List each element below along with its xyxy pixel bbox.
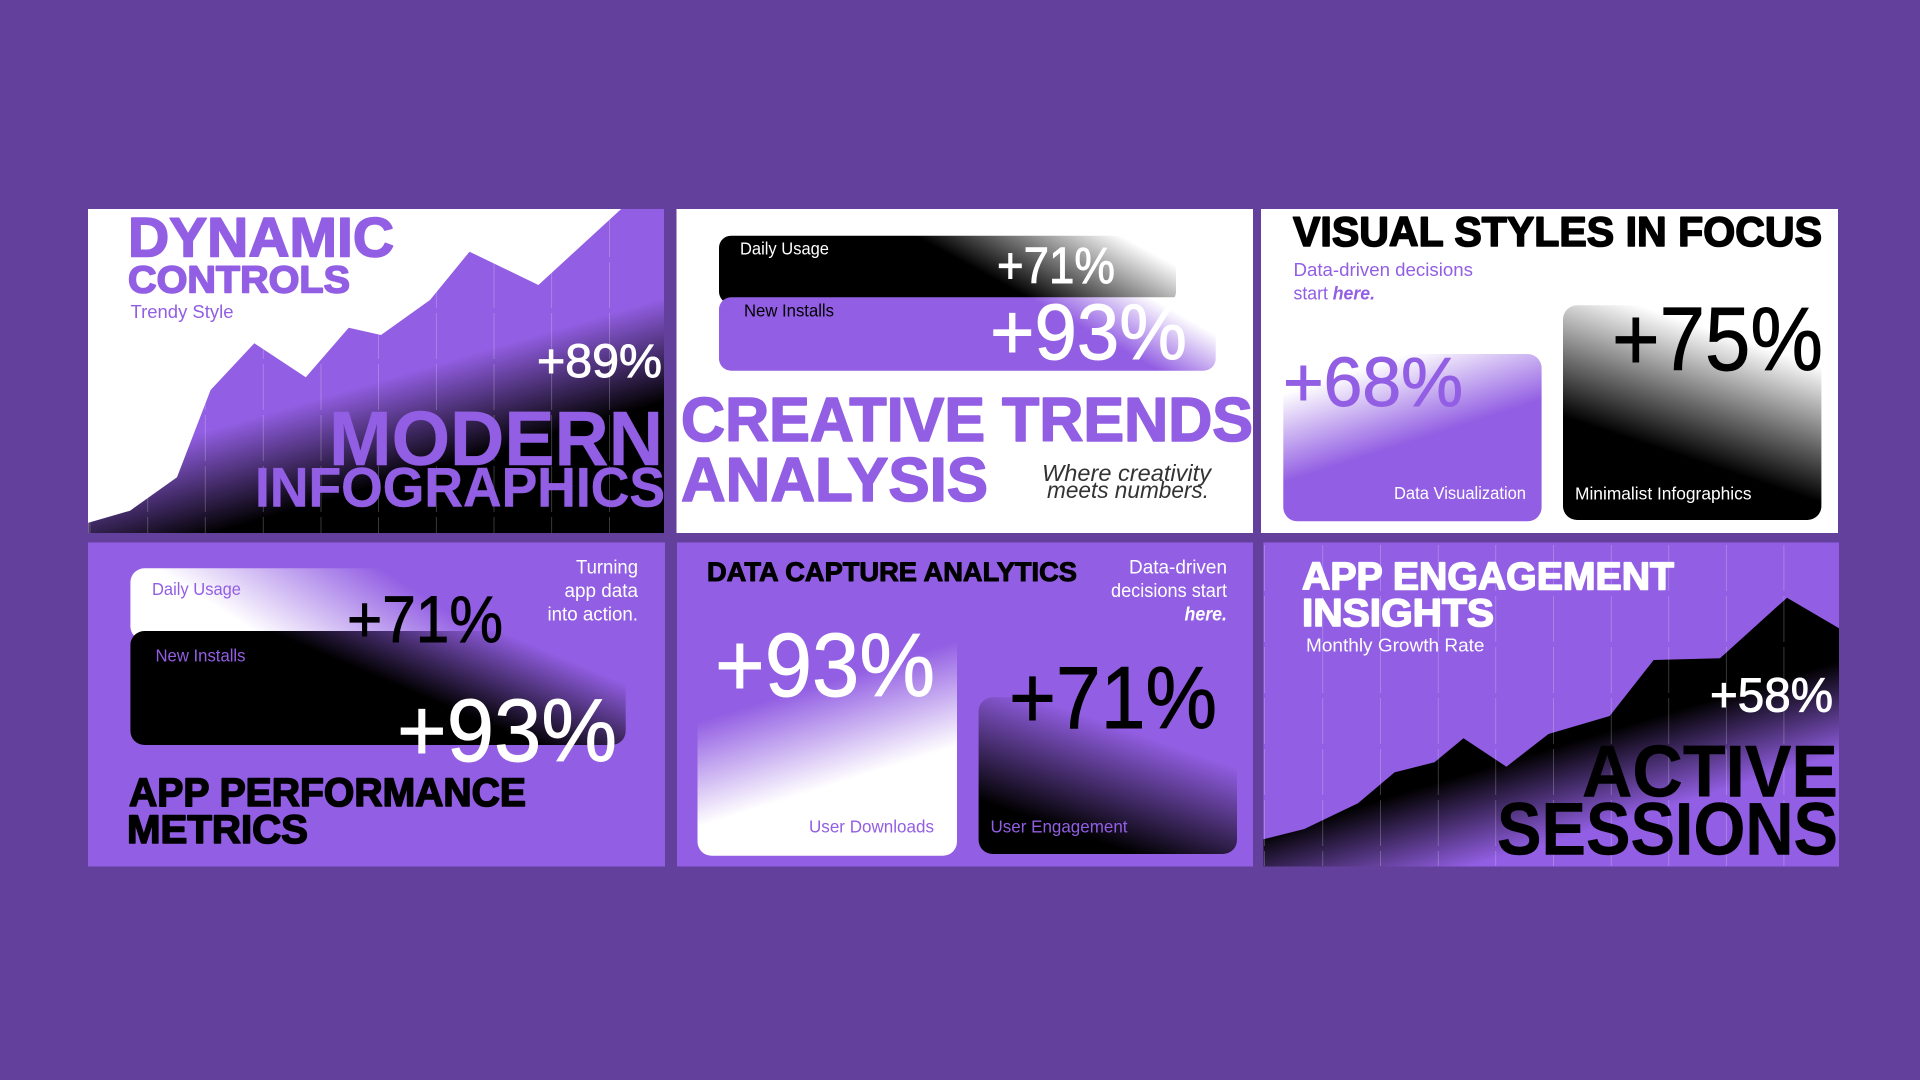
bar: new installs [130, 631, 626, 745]
stat: +93%: +93% [715, 616, 935, 716]
note: data-driven decisions start here: here. [1184, 604, 1227, 626]
subtitle: trendy style: Trendy Style [130, 302, 234, 322]
panel: visual styles in focus [1261, 208, 1838, 533]
stat: +93%: +93% [990, 287, 1187, 376]
heading: active: ACTIVE [1582, 732, 1838, 813]
tagline: where creativity meets numbers: Where creativity [1042, 460, 1212, 486]
heading: modern: MODERN [329, 396, 663, 482]
subtitle: data-driven decisions: start here. [1294, 282, 1375, 304]
bar: daily usage [130, 568, 505, 640]
card: data visualization [1283, 343, 1542, 521]
card: minimalist infographics [1563, 290, 1823, 520]
tagline: where creativity meets numbers [1042, 460, 1212, 503]
panel: creative trends analysis [676, 209, 1253, 533]
area chart: black gradient [1263, 598, 1839, 866]
area chart: rising gradient [88, 209, 664, 533]
heading: dynamic: DYNAMIC [128, 206, 394, 268]
heading: visual styles in focus: VISUAL STYLES IN FOCUS [1293, 208, 1822, 255]
label: minimalist infographics: Minimalist Infographics [1575, 483, 1752, 503]
note: turning app data into action: app data [564, 581, 638, 602]
card: user downloads [698, 616, 957, 856]
label: daily usage: Daily Usage [740, 238, 829, 258]
stat: +68%: +68% [1283, 343, 1463, 421]
label: user downloads: User Downloads [809, 816, 934, 836]
subtitle: data-driven decisions: Data-driven decisions [1294, 259, 1473, 280]
stat: +71%: +71% [997, 237, 1115, 294]
label: data visualization: Data Visualization [1394, 483, 1526, 503]
note: turning app data into action: Turning [576, 558, 638, 578]
label: new installs: New Installs [156, 646, 246, 666]
stat: +71%: +71% [347, 582, 503, 656]
stat: +58%: +58% [1710, 670, 1833, 722]
panel: dynamic controls [88, 206, 665, 533]
subtitle: data-driven decisions [1294, 259, 1473, 304]
heading: analysis: ANALYSIS [681, 446, 988, 515]
note: data-driven decisions start here: Data-driven [1129, 558, 1227, 578]
heading: insights: INSIGHTS [1302, 592, 1494, 635]
heading: app performance: APP PERFORMANCE [129, 771, 526, 815]
tagline: where creativity meets numbers: meets numbers. [1047, 477, 1209, 503]
panel: app performance metrics [88, 542, 665, 866]
card: user engagement [979, 648, 1237, 854]
heading: creative trends: CREATIVE TRENDS [681, 386, 1253, 455]
bar: new installs [719, 287, 1216, 376]
note: turning app data into action: into action. [548, 604, 638, 626]
stat: +89%: +89% [537, 334, 662, 387]
panel: data capture analytics [677, 542, 1253, 866]
heading: infographics: INFOGRAPHICS [255, 456, 665, 518]
heading: data capture analytics: DATA CAPTURE ANALYTICS [707, 557, 1077, 587]
subtitle: monthly growth rate: Monthly Growth Rate [1306, 636, 1484, 656]
bar: daily usage [719, 236, 1176, 304]
heading: sessions: SESSIONS [1497, 788, 1838, 870]
stat: +75%: +75% [1612, 290, 1823, 390]
note: data-driven decisions start here [1111, 558, 1228, 626]
label: user engagement: User Engagement [990, 816, 1128, 836]
label: new installs: New Installs [744, 301, 834, 321]
heading: metrics: METRICS [127, 808, 308, 852]
heading: controls: CONTROLS [128, 260, 350, 302]
stat: +71%: +71% [1009, 648, 1217, 747]
stat: +93%: +93% [397, 680, 617, 780]
note: data-driven decisions start here: decisions start [1111, 581, 1228, 602]
note: turning app data into action [548, 558, 638, 626]
heading: app engagement: APP ENGAGEMENT [1302, 556, 1674, 598]
panel: app engagement insights [1263, 542, 1839, 870]
label: daily usage: Daily Usage [152, 579, 241, 599]
